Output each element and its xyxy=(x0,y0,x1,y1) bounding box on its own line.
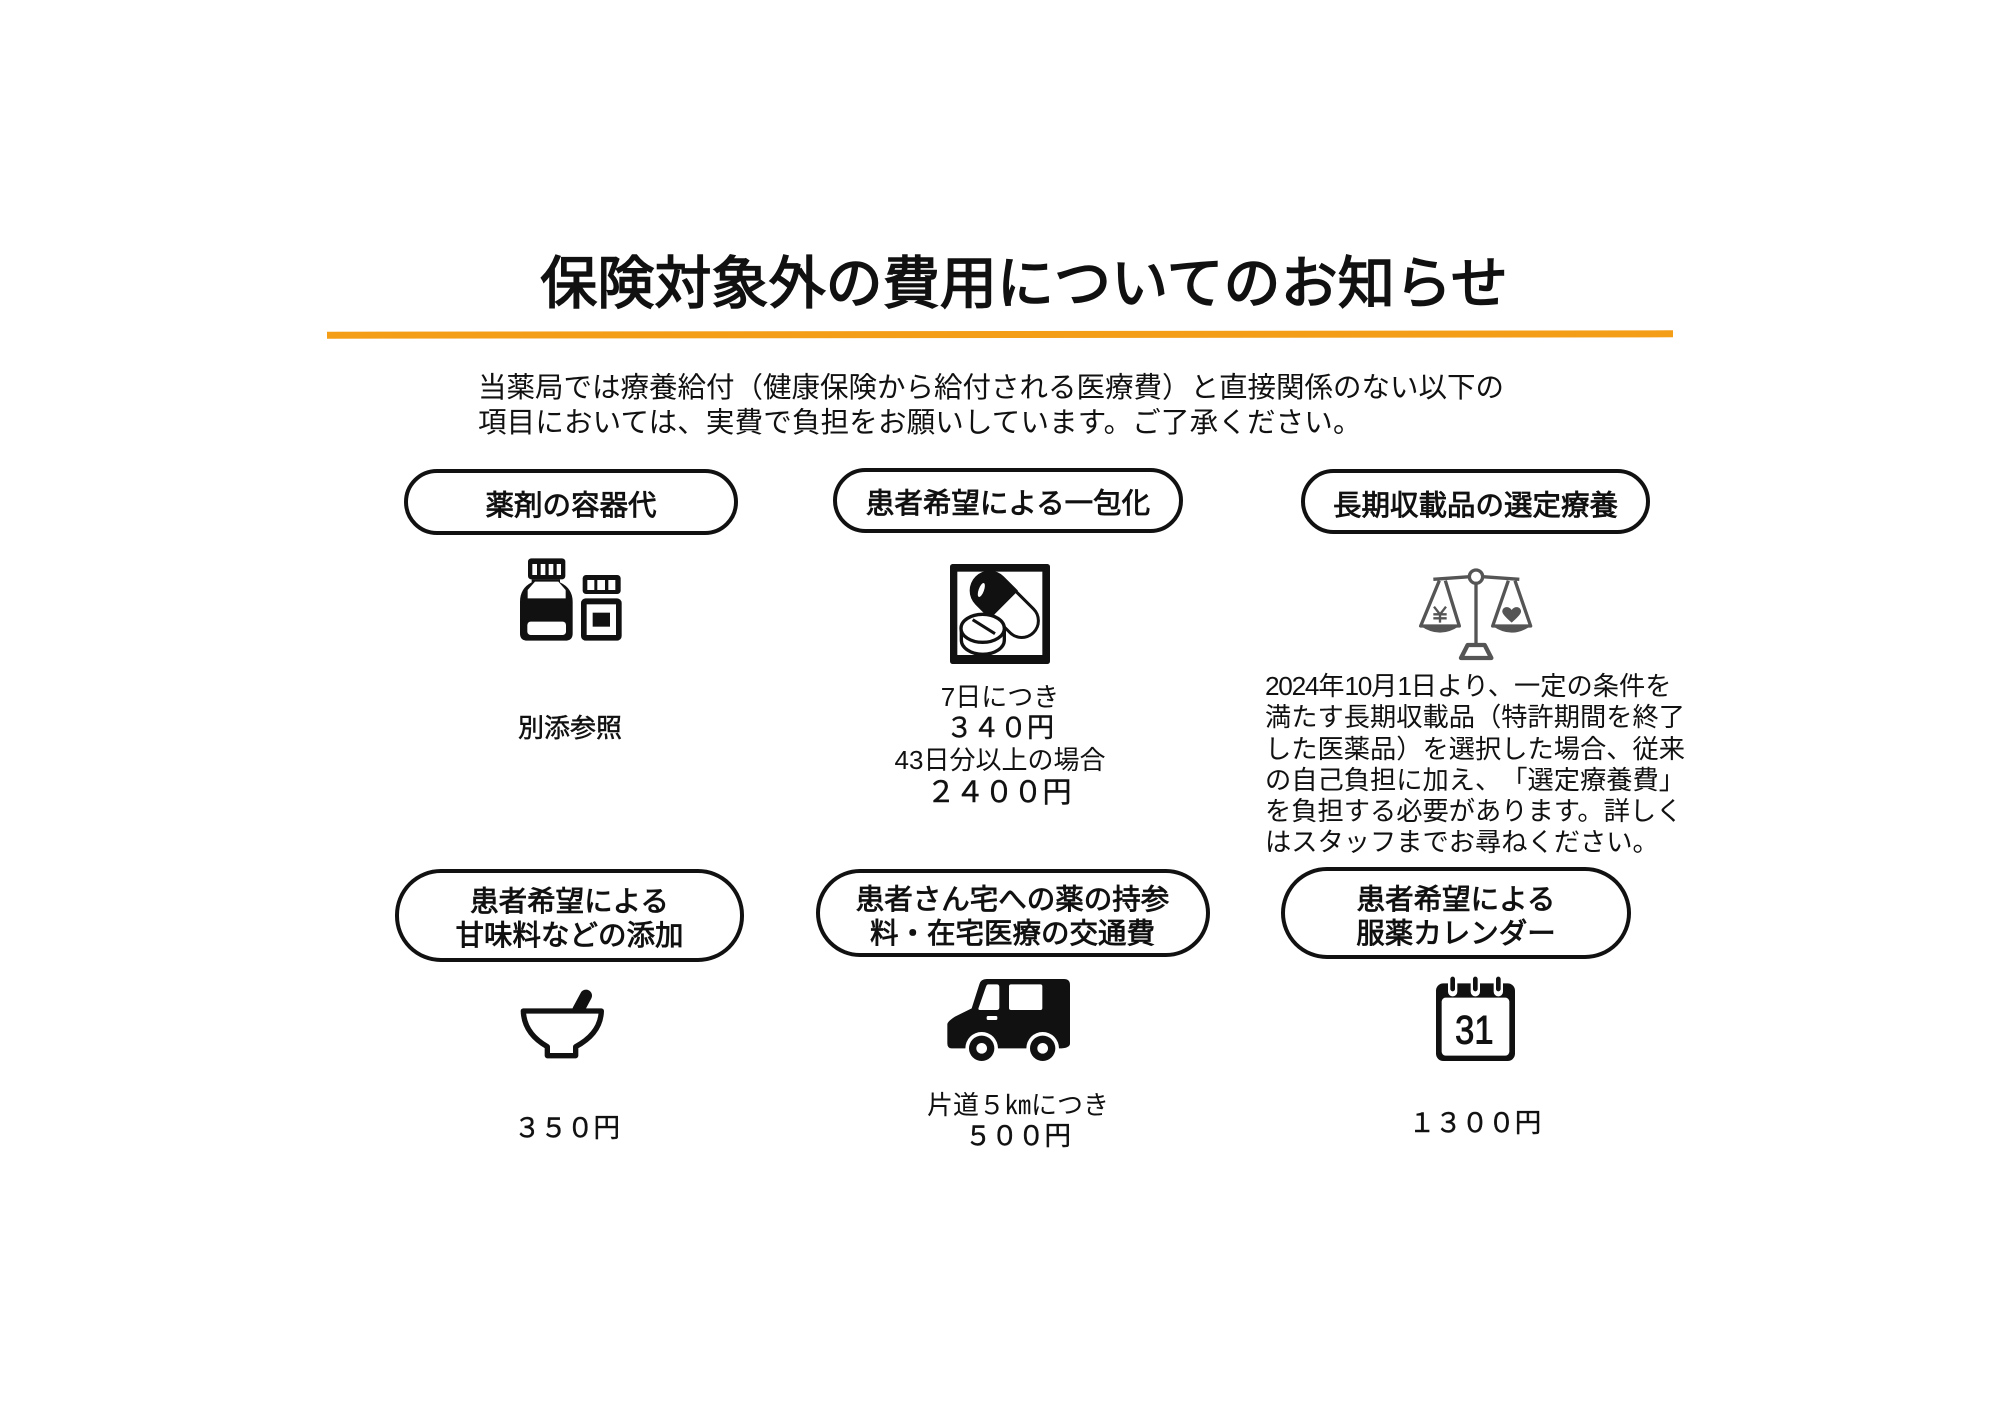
icon: pills in packet xyxy=(950,564,1050,664)
pill: sweetener additive xyxy=(395,869,744,962)
intro text: 当薬局では療養給付（健康保険から給付される医療費）と直接関係のない以下の xyxy=(478,372,1504,404)
icon: mortar and pestle xyxy=(520,990,604,1058)
text: one-dose packaging prices: 7日につき xyxy=(941,682,1059,712)
pill: medication calendar: 服薬カレンダー xyxy=(1356,918,1556,950)
icon: medicine bottles xyxy=(520,558,622,641)
pill: medication calendar: 患者希望による xyxy=(1357,884,1555,916)
pill: medication calendar xyxy=(1281,867,1631,959)
text: long-listed drug explanation xyxy=(1265,671,1685,857)
text: delivery price xyxy=(927,1090,1109,1151)
pill: sweetener additive: 甘味料などの添加 xyxy=(455,920,684,952)
text: one-dose packaging prices: ２４００円 xyxy=(926,777,1072,809)
intro text: 項目においては、実費で負担をお願いしています。ご了承ください。 xyxy=(478,406,1362,438)
text: see attachment: 別添参照 xyxy=(518,713,622,743)
text: long-listed drug explanation: の自己負担に加え、「選定療養費」 xyxy=(1265,765,1685,795)
text: one-dose packaging prices: ３４０円 xyxy=(946,713,1054,743)
pill: home delivery: 患者さん宅への薬の持参 xyxy=(856,884,1169,916)
pill: container cost: 薬剤の容器代 xyxy=(485,490,656,522)
text: long-listed drug explanation: 2024年10月1日より、一定の条件を xyxy=(1265,671,1672,701)
title: 保険対象外の費用についてのお知らせ xyxy=(540,252,1508,316)
icon: balance scale xyxy=(1418,568,1532,660)
pill: one-dose packaging: 患者希望による一包化 xyxy=(866,488,1150,520)
text: one-dose packaging prices xyxy=(895,682,1105,809)
pill: long-listed drugs: 長期収載品の選定療養 xyxy=(1333,490,1618,522)
icon: calendar: 31 xyxy=(1455,1008,1494,1052)
text: delivery price: 片道５㎞につき xyxy=(927,1090,1109,1120)
intro text xyxy=(478,372,1504,438)
text: long-listed drug explanation: 満たす長期収載品（特許期間を終了 xyxy=(1265,702,1685,732)
text: one-dose packaging prices: 43日分以上の場合 xyxy=(895,745,1105,775)
text: long-listed drug explanation: した医薬品）を選択した場合、従来 xyxy=(1265,734,1685,764)
pill: one-dose packaging xyxy=(833,468,1183,533)
pill: long-listed drugs xyxy=(1301,469,1650,534)
icon: calendar xyxy=(1436,976,1515,1061)
icon: delivery van xyxy=(947,979,1070,1061)
text: long-listed drug explanation: はスタッフまでお尋ねください。 xyxy=(1265,827,1659,857)
text: long-listed drug explanation: を負担する必要があります。詳しく xyxy=(1265,796,1682,826)
text: sweetener price: ３５０円 xyxy=(514,1113,620,1143)
pill: sweetener additive: 患者希望による xyxy=(470,886,669,918)
pill: container cost xyxy=(404,469,738,535)
pill: home delivery: 料・在宅医療の交通費 xyxy=(870,918,1155,950)
text: delivery price: ５００円 xyxy=(965,1121,1071,1151)
orange title rule xyxy=(327,330,1673,339)
pill: home delivery xyxy=(816,869,1210,957)
text: calendar price: １３００円 xyxy=(1409,1108,1541,1138)
